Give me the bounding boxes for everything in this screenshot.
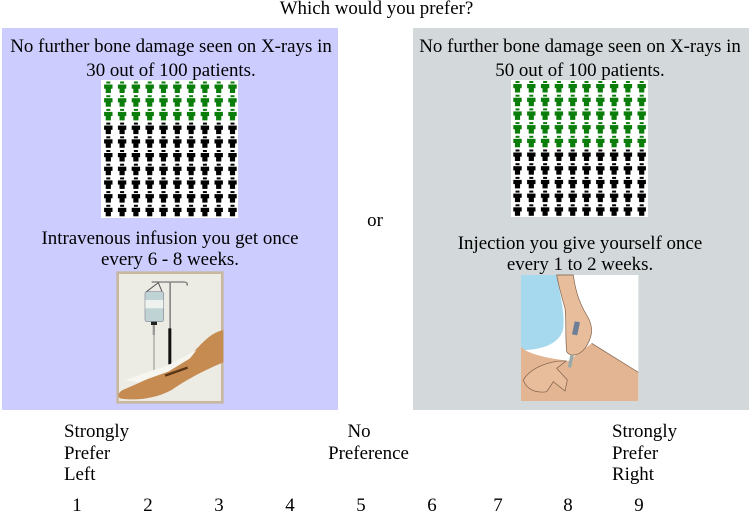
scale label: no preference: Preference xyxy=(328,443,409,464)
image: self injection xyxy=(521,275,638,401)
scale label: strongly prefer left: Strongly xyxy=(64,421,130,442)
connector word: or: or xyxy=(367,210,384,231)
panel: left option xyxy=(2,28,338,410)
treatment text: injection: Injection you give yourself once xyxy=(458,233,702,254)
rating scale numbers xyxy=(72,495,644,514)
benefit text: left: 30 out of 100 patients. xyxy=(86,60,256,81)
panel: right option xyxy=(413,28,749,410)
image: intravenous infusion xyxy=(118,273,223,402)
scale label: no preference: No xyxy=(347,421,371,442)
treatment text: infusion: every 6 - 8 weeks. xyxy=(101,249,239,270)
treatment text: injection: every 1 to 2 weeks. xyxy=(507,254,653,275)
scale label: strongly prefer right: Right xyxy=(612,464,655,485)
scale label: strongly prefer left: Left xyxy=(64,464,96,485)
scale label: strongly prefer right: Strongly xyxy=(612,421,678,442)
benefit text: right: No further bone damage seen on X-rays in xyxy=(419,36,741,57)
scale label: strongly prefer left: Prefer xyxy=(64,443,111,464)
icon array: 30 of 100 xyxy=(101,80,238,218)
icon array: 50 of 100 xyxy=(511,80,648,217)
benefit text: right: 50 out of 100 patients. xyxy=(495,60,665,81)
scale label: strongly prefer right: Prefer xyxy=(612,443,659,464)
benefit text: left: No further bone damage seen on X-rays in xyxy=(10,36,332,57)
treatment text: infusion: Intravenous infusion you get once xyxy=(41,228,299,249)
